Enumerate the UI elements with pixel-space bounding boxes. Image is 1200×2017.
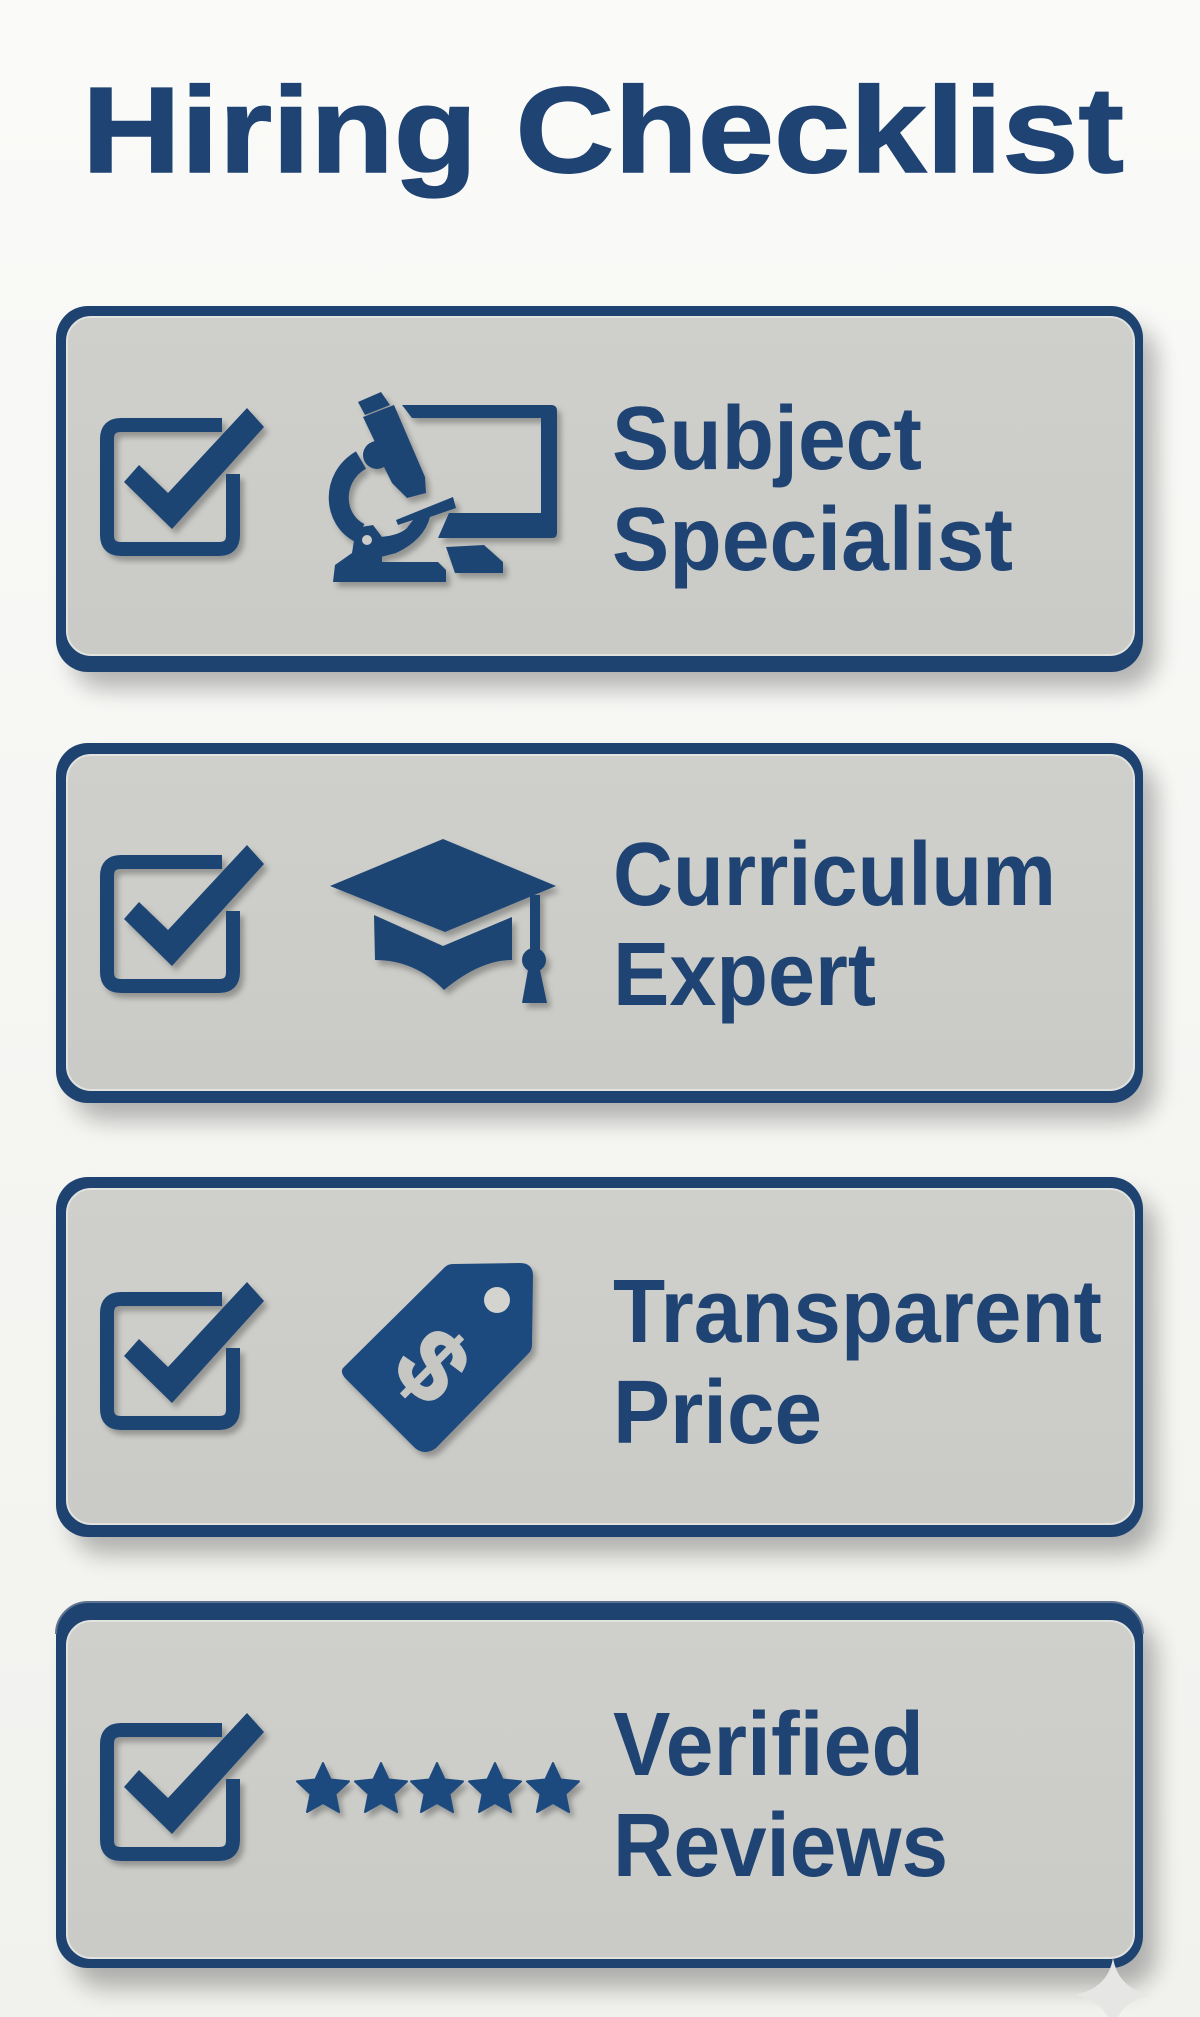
title: Hiring Checklist [82, 62, 1124, 198]
icon: graduation cap [330, 839, 556, 1003]
label: curriculum expert [613, 825, 1056, 1025]
icon: price tag: $ [373, 1306, 492, 1425]
checkbox icon [107, 1713, 264, 1854]
label: transparent price [613, 1262, 1102, 1463]
label: curriculum expert: Curriculum [613, 825, 1056, 925]
panel: curriculum expert [56, 743, 1156, 1120]
label: verified reviews: Verified [613, 1695, 924, 1795]
panel: verified reviews [56, 1602, 1156, 1988]
label: transparent price: Price [613, 1363, 822, 1463]
checkbox icon [107, 408, 264, 549]
label: transparent price: Transparent [613, 1262, 1102, 1362]
icon: price tag [342, 1263, 533, 1452]
panel: subject specialist [56, 306, 1156, 688]
label: subject specialist: Subject [612, 389, 922, 489]
label: subject specialist: Specialist [612, 490, 1013, 590]
label: verified reviews: Reviews [613, 1796, 948, 1896]
icon: microscope and monitor [333, 392, 557, 582]
label: curriculum expert: Expert [613, 925, 876, 1025]
checkbox icon [107, 845, 264, 986]
icon: five stars [297, 1763, 579, 1812]
checkbox icon [107, 1282, 264, 1423]
panel: transparent price [56, 1177, 1156, 1554]
icon: sparkle watermark [1075, 1958, 1150, 2017]
label: subject specialist [612, 389, 1013, 590]
label: verified reviews [613, 1695, 948, 1896]
